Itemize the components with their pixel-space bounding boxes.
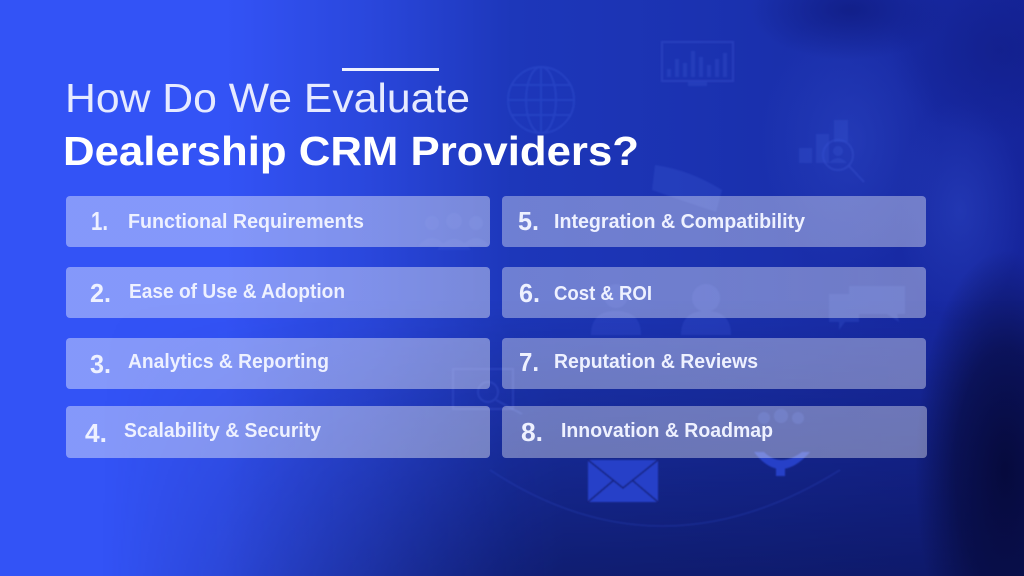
icon: review screen	[453, 369, 522, 414]
background: bottom shading	[136, 330, 1024, 576]
card 3: Analytics & Reporting	[128, 351, 329, 373]
card 6	[502, 267, 926, 318]
icon: monitor bar chart	[662, 42, 733, 86]
card 8: Innovation & Roadmap	[561, 420, 773, 442]
card 6: 6.	[519, 278, 540, 308]
card 2: 2.	[90, 278, 111, 308]
card 1: Functional Requirements	[128, 211, 364, 233]
card 7	[502, 338, 926, 389]
card 8: 8.	[521, 417, 543, 447]
card 2: Ease of Use & Adoption	[129, 281, 345, 303]
card 1	[66, 196, 490, 247]
card 2	[66, 267, 490, 318]
card 8	[502, 406, 927, 458]
title: Dealership CRM Providers?	[63, 128, 639, 174]
card 3	[66, 338, 490, 389]
card 5: Integration & Compatibility	[554, 211, 806, 233]
icon: team behind first card	[418, 213, 490, 250]
card 4: 4.	[85, 418, 107, 448]
card 5: 5.	[518, 206, 539, 236]
icon: chat bubbles	[829, 286, 905, 330]
card 7: Reputation & Reviews	[554, 351, 758, 373]
icon: envelope	[588, 460, 658, 502]
card 4	[66, 406, 490, 458]
icon: phone handset swoosh	[652, 165, 722, 212]
icon: globe	[508, 67, 574, 133]
icon: analytics magnifier	[799, 120, 864, 182]
title accent line	[342, 68, 439, 71]
title	[63, 75, 639, 174]
decorative ring	[490, 470, 840, 526]
card 1: 1.	[91, 206, 108, 236]
icon: gear team	[754, 409, 810, 476]
background icons	[418, 42, 905, 526]
card 6: Cost & ROI	[554, 283, 652, 305]
card 7: 7.	[519, 347, 539, 377]
icon: persons	[591, 284, 731, 335]
card 4: Scalability & Security	[124, 420, 322, 442]
card 3: 3.	[90, 349, 111, 379]
title: How Do We Evaluate	[65, 75, 470, 121]
card 5	[502, 196, 926, 247]
